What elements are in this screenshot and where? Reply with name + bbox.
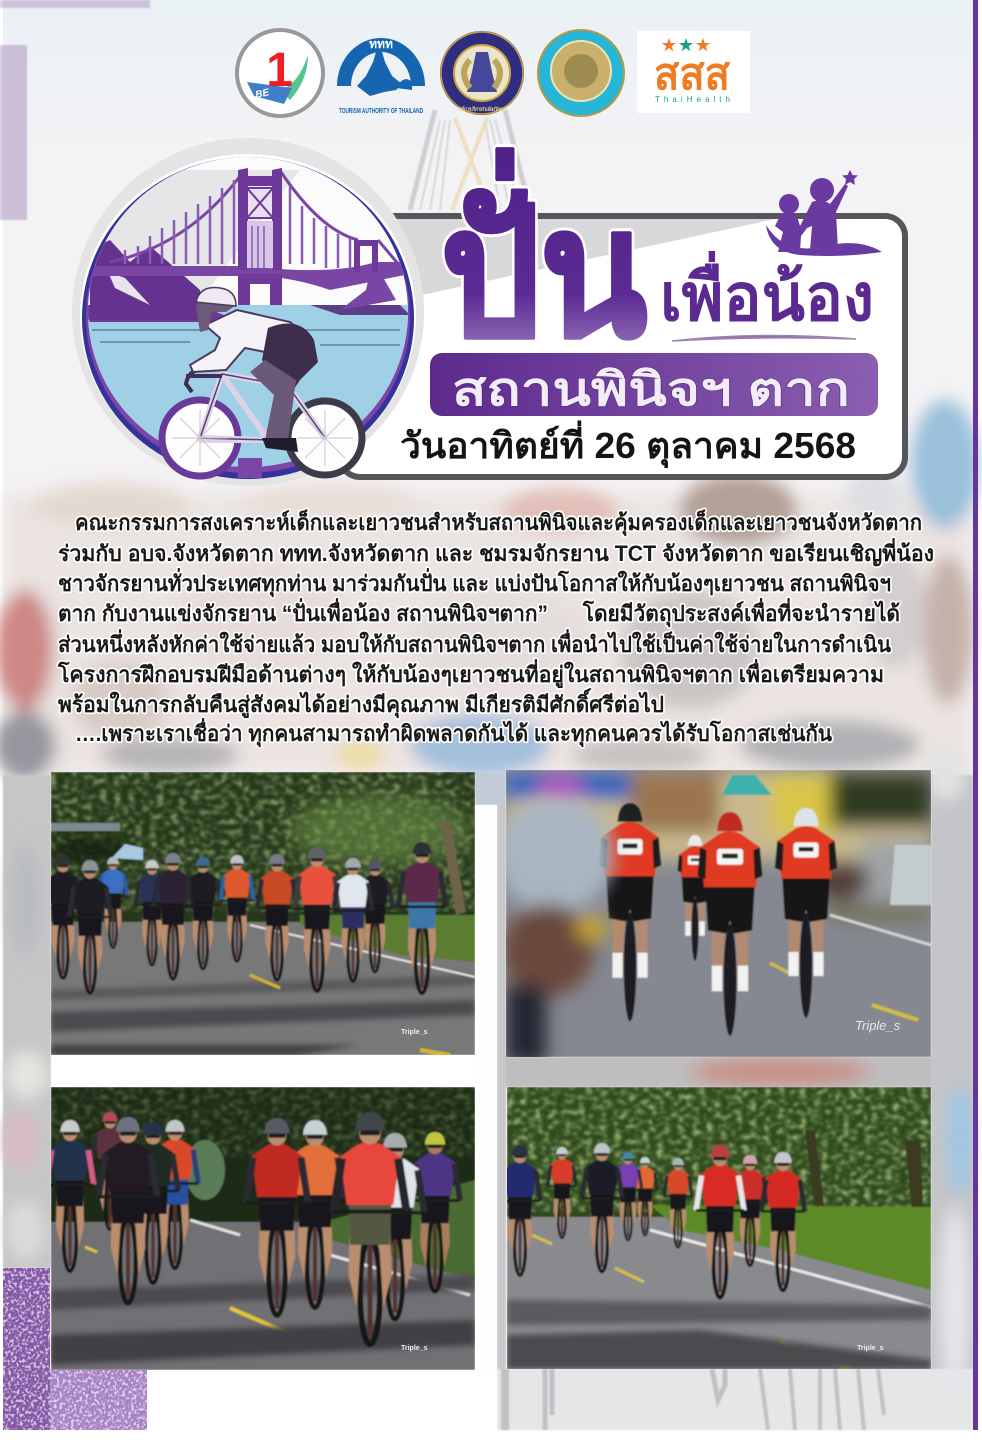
photo: peloton on a tree-lined road	[44, 772, 475, 1055]
logo: Tourism Authority of Thailand: ททท	[369, 37, 393, 51]
intro paragraph: ชาวจักรยานทั่วประเทศทุกท่าน มาร่วมกันปั่น และ แบ่งปันโอกาสให้กับน้องๆเยาวชน สถานพินิจฯ	[58, 567, 891, 598]
intro paragraph: โครงการฝึกอบรมฝีมือด้านต่างๆ ให้กับน้องๆเยาวชนที่อยู่ในสถานพินิจฯตาก เพื่อเตรียมความ	[57, 658, 884, 689]
intro paragraph: ….เพราะเราเชื่อว่า ทุกคนสามารถทำผิดพลาดกันได้ และทุกคนควรได้รับโอกาสเช่นกัน	[75, 717, 832, 748]
logo: ThaiHealth: สสส	[654, 50, 730, 99]
heading: ปั่น: ปั่น	[441, 149, 647, 373]
photo: three riders seen from behind	[497, 770, 931, 1065]
heading: เพื่อน้อง: เพื่อน้อง	[660, 250, 874, 334]
icon: two children reaching for a star	[766, 170, 882, 256]
badge rings	[72, 138, 424, 486]
panel frame	[340, 216, 905, 477]
cyclist	[162, 288, 362, 478]
logo: To Be Number One	[237, 30, 323, 116]
logo row	[237, 30, 750, 116]
watermark: Triple_s	[857, 1345, 884, 1352]
photo: riders in red jerseys by the grass verge	[500, 1087, 931, 1369]
faded bike wheels below the photos	[505, 1369, 884, 1430]
logo: provincial administrative organisation seal: องค์การบริหารส่วนจังหวัดตาก	[457, 105, 507, 113]
heading: ปั่น: ปั่น	[441, 149, 647, 373]
intro paragraph: พร้อมในการกลับคืนสู่สังคมได้อย่างมีคุณภาพ มีเกียรติมีศักดิ์ศรีต่อไป	[58, 688, 664, 719]
logo: ThaiHealth: ★	[678, 37, 694, 54]
banner: สถานพินิจฯ ตาก: สถานพินิจฯ ตาก	[452, 363, 850, 415]
watermark: Triple_s	[855, 1018, 901, 1033]
brush underline	[672, 335, 856, 341]
bridge scene	[80, 168, 420, 480]
logo: Tourism Authority of Thailand	[337, 37, 425, 115]
logo: ThaiHealth: ★	[695, 37, 711, 54]
right purple border line	[973, 0, 978, 1430]
intro paragraph	[57, 508, 934, 748]
intro paragraph: คณะกรรมการสงเคราะห์เด็กและเยาวชนสำหรับสถานพินิจและคุ้มครองเด็กและเยาวชนจังหวัดตาก	[75, 508, 922, 537]
pale gray strips around the photos	[3, 772, 973, 1430]
logo: Tourism Authority of Thailand: TOURISM AUTHORITY OF THAILAND	[339, 108, 423, 115]
logo: ThaiHealth: ★	[661, 37, 677, 54]
watermark: Triple_s	[401, 1029, 428, 1036]
white gutters between the left photos	[51, 1055, 497, 1087]
logo: To Be Number One: 1	[266, 44, 293, 97]
logo: ThaiHealth: ThaiHealth	[655, 95, 731, 104]
logo: gold and cyan seal	[538, 30, 624, 116]
decorative purple texture, top left	[0, 0, 150, 220]
banner: สถานพินิจฯ ตาก	[430, 353, 878, 416]
intro paragraph: ส่วนหนึ่งหลังหักค่าใช้จ่ายแล้ว มอบให้กับสถานพินิจฯตาก เพื่อนำไปใช้เป็นค่าใช้จ่ายในการดำเนิน	[58, 628, 891, 657]
circular badge: bridge and cyclist	[72, 138, 424, 486]
faint bridge tower behind the logos	[410, 110, 530, 210]
date: วันอาทิตย์ที่ 26 ตุลาคม 2568	[400, 420, 856, 469]
logo: provincial administrative organisation seal	[440, 31, 524, 115]
photo: close-up riders on a curve	[46, 1087, 475, 1370]
event title panel	[340, 149, 905, 477]
watermark: Triple_s	[401, 1345, 428, 1352]
intro paragraph: ร่วมกับ อบจ.จังหวัดตาก ททท.จังหวัดตาก และ ชมรมจักรยาน TCT จังหวัดตาก ขอเรียนเชิญพี่น้อง	[58, 537, 934, 567]
intro paragraph: ตาก กับงานแข่งจักรยาน “ปั่นเพื่อน้อง สถานพินิจฯตาก” โดยมีวัตถุประสงค์เพื่อที่จะนำรายได้	[58, 597, 900, 628]
logo: ThaiHealth	[637, 31, 750, 113]
decorative purple texture, bottom left	[3, 1268, 147, 1430]
faded rider collage behind the text	[0, 400, 979, 780]
logo: To Be Number One: BE	[254, 87, 271, 101]
